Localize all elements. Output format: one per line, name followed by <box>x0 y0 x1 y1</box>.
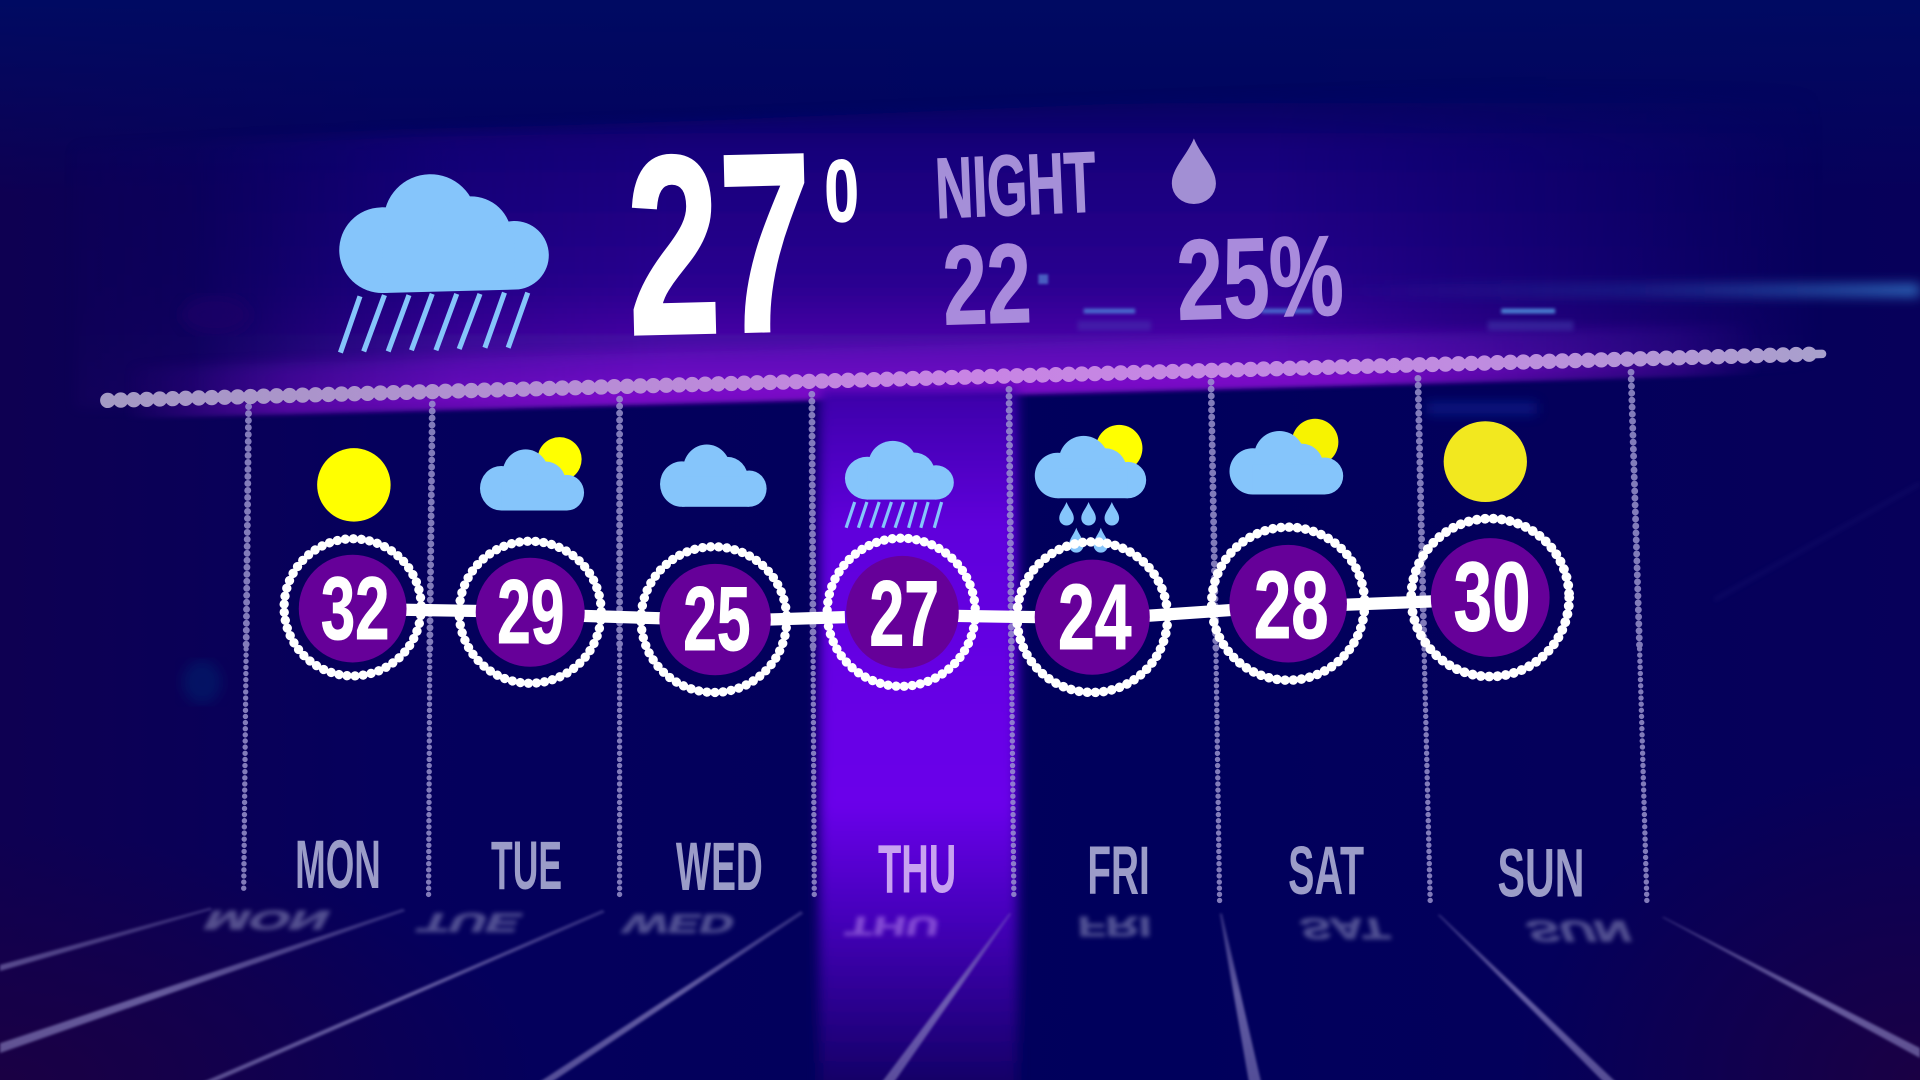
THU forecast <box>827 441 975 686</box>
icon: sun behind cloud <box>480 437 584 511</box>
temperature disc <box>846 556 959 669</box>
temperature: 25 <box>683 569 751 670</box>
day label floor reflections: SAT <box>1296 911 1393 944</box>
day labels: FRI <box>1087 832 1150 909</box>
temperature disc <box>299 555 407 662</box>
temperature: 30 <box>1453 542 1531 652</box>
day labels: SUN <box>1498 834 1584 911</box>
icon: rain cloud <box>845 441 954 528</box>
lens streaks and light flares <box>181 274 1920 704</box>
highlighted column: Thursday <box>819 389 1018 1080</box>
dotted ring <box>827 538 975 686</box>
temperature: 28 <box>1254 553 1329 659</box>
panel: purple header band <box>148 103 1764 405</box>
glow strip along the horizon bar <box>122 323 1763 419</box>
temperature: 24 <box>1058 565 1132 669</box>
temperature disc <box>1431 538 1550 657</box>
temperature connector line <box>404 601 1435 620</box>
current temperature: 27 <box>624 99 816 388</box>
day label floor reflections: THU <box>843 912 941 941</box>
dotted ring <box>1017 542 1168 692</box>
dotted ring <box>1212 527 1365 680</box>
floor grid lines <box>0 907 1920 1080</box>
icon: sun <box>317 448 391 522</box>
icon: large rain cloud <box>337 171 550 353</box>
temperature disc <box>1035 560 1150 675</box>
dotted ring <box>1411 519 1569 677</box>
icon: sun <box>1444 421 1527 502</box>
humidity <box>1172 138 1345 345</box>
WED forecast <box>641 444 787 692</box>
FRI forecast <box>1017 425 1168 692</box>
day label floor reflections: WED <box>619 908 739 938</box>
day labels: MON <box>295 826 381 903</box>
temperature disc <box>476 558 585 667</box>
day labels: WED <box>676 828 763 905</box>
dotted ring <box>641 547 787 692</box>
temperature disc <box>1229 545 1347 662</box>
day label floor reflections: MON <box>198 905 336 934</box>
icon: sun, cloud and rain drops <box>1035 425 1146 553</box>
day labels: SAT <box>1288 832 1364 909</box>
icon: sun behind cloud <box>1229 419 1343 494</box>
TUE forecast <box>459 437 601 683</box>
MON forecast <box>284 448 421 676</box>
dotted ring <box>284 539 421 676</box>
icon: cloud <box>660 444 767 507</box>
day label floor reflections: SUN <box>1521 914 1637 947</box>
temperature: 27 <box>869 561 939 665</box>
day label floor reflections <box>198 905 1637 947</box>
day labels <box>295 826 1584 911</box>
dotted horizon bar <box>108 354 1822 400</box>
dotted ring <box>459 541 601 683</box>
temperature disc <box>659 564 771 675</box>
SAT forecast <box>1212 419 1365 680</box>
night temperature: NIGHT <box>934 134 1098 237</box>
temperature: 29 <box>497 562 564 663</box>
current temperature: 0 <box>823 141 860 241</box>
night temperature <box>934 134 1098 348</box>
SUN forecast <box>1411 421 1569 677</box>
temperature: 32 <box>321 558 389 658</box>
night temperature: 22 <box>941 220 1033 348</box>
humidity: 25% <box>1175 212 1345 345</box>
day label floor reflections: FRI <box>1077 910 1152 941</box>
day label floor reflections: TUE <box>414 907 527 936</box>
column divider dotted lines <box>244 372 1647 904</box>
day labels: TUE <box>491 827 562 904</box>
day labels: THU <box>878 831 956 908</box>
